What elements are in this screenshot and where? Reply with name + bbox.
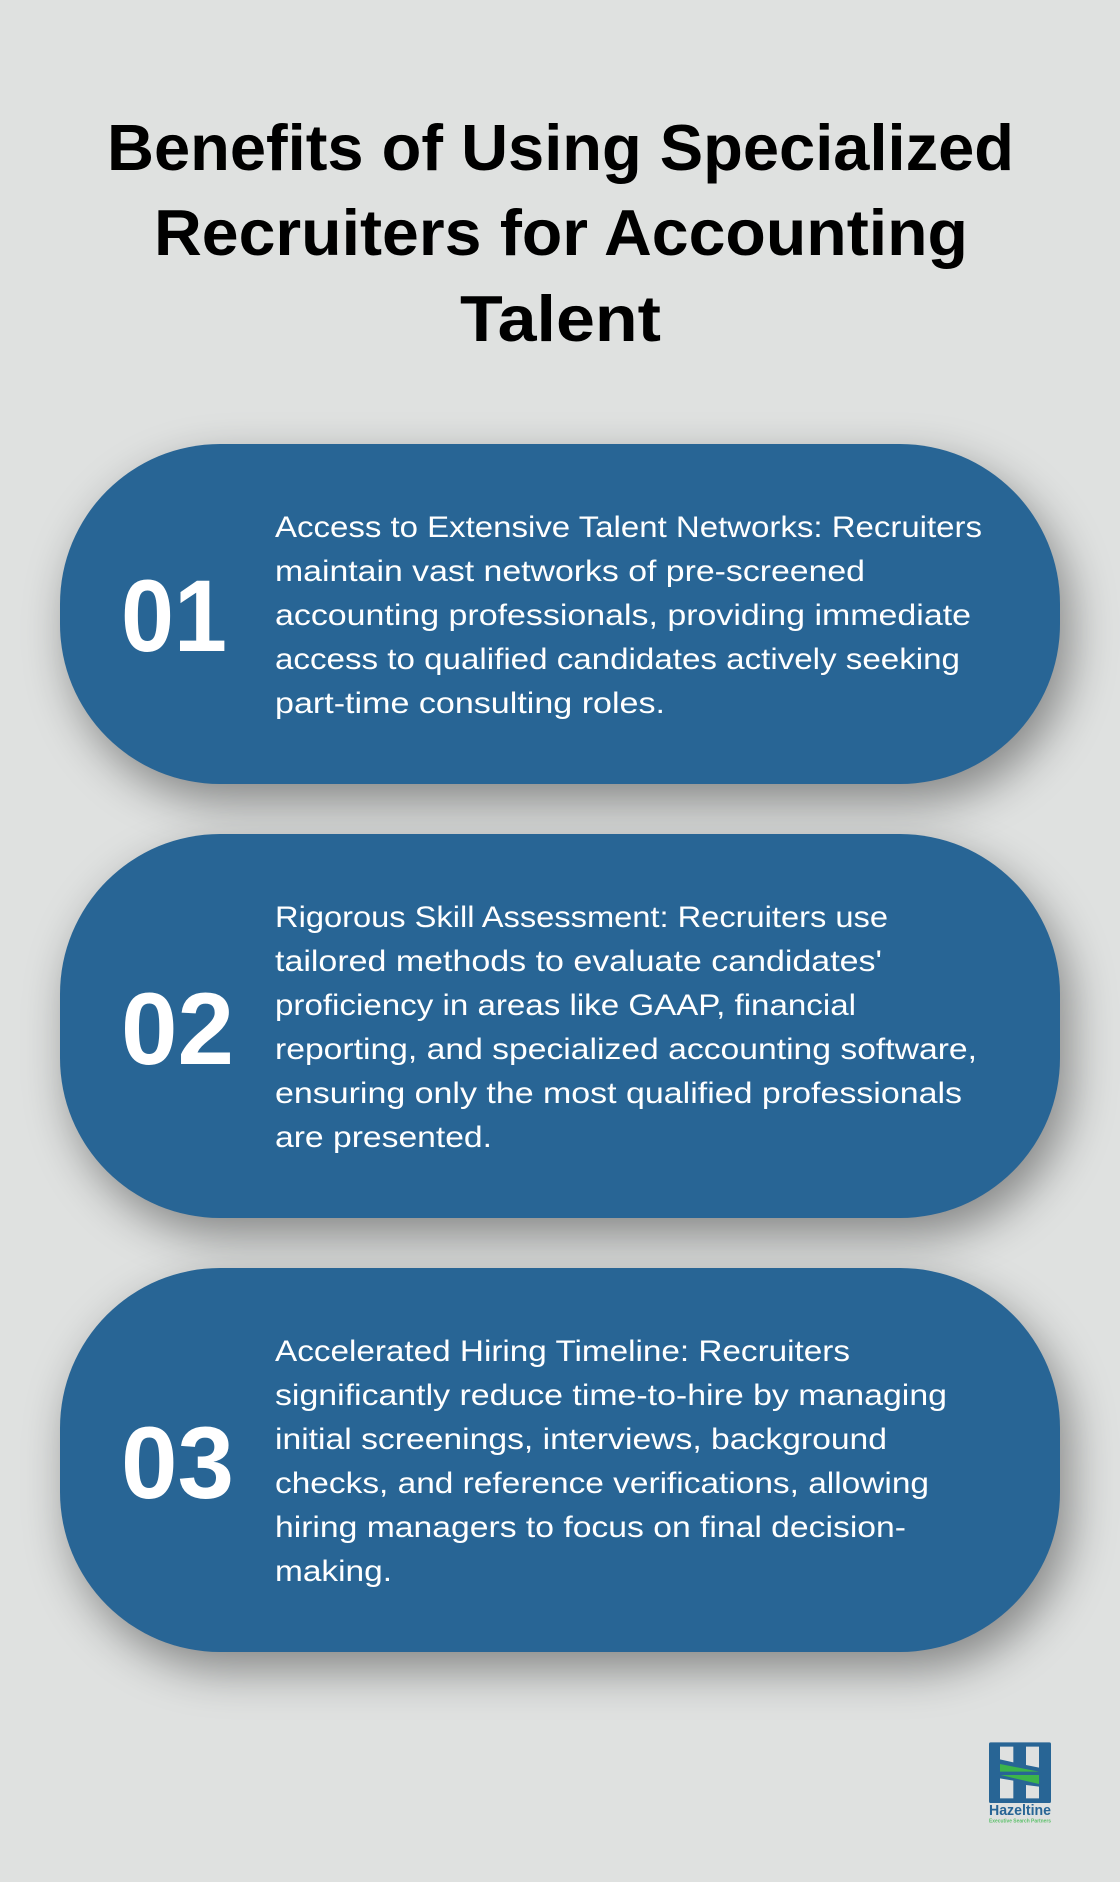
text: skill assessment description: tailored methods to evaluate candidates' [275, 945, 882, 978]
icon: Hazeltine logo: Executive Search Partners [989, 1818, 1051, 1824]
text: skill assessment description [275, 901, 977, 1154]
text: talent networks description: part-time consulting roles. [275, 687, 665, 720]
text: hiring timeline description: initial screenings, interviews, background [275, 1423, 887, 1456]
text: skill assessment description: proficiency in areas like GAAP, financial [275, 989, 856, 1022]
number 01: 01 [121, 559, 227, 673]
text: talent networks description: maintain vast networks of pre-screened [275, 555, 865, 588]
text: hiring timeline description [275, 1335, 947, 1588]
title: Talent [460, 282, 661, 355]
panel: hiring timeline [60, 1268, 1060, 1652]
text: talent networks description [275, 511, 982, 720]
panel: skill assessment [60, 834, 1060, 1218]
title [107, 111, 1014, 355]
icon: Hazeltine logo [989, 1742, 1051, 1824]
text: skill assessment description: are presented. [275, 1121, 492, 1154]
title: Recruiters for Accounting [154, 196, 968, 269]
text: hiring timeline description: checks, and reference verifications, allowing [275, 1467, 929, 1500]
text: skill assessment description: ensuring only the most qualified professionals [275, 1077, 962, 1110]
text: hiring timeline description: hiring managers to focus on final decision- [275, 1511, 906, 1544]
title: Benefits of Using Specialized [107, 111, 1014, 184]
number 02: 02 [121, 972, 234, 1086]
text: skill assessment description: reporting, and specialized accounting software, [275, 1033, 977, 1066]
text: talent networks description: Access to Extensive Talent Networks: Recruiters [275, 511, 982, 544]
panel: talent networks [60, 444, 1060, 784]
text: hiring timeline description: significantly reduce time-to-hire by managing [275, 1379, 947, 1412]
text: hiring timeline description: Accelerated Hiring Timeline: Recruiters [275, 1335, 850, 1368]
text: talent networks description: accounting professionals, providing immediate [275, 599, 971, 632]
text: skill assessment description: Rigorous Skill Assessment: Recruiters use [275, 901, 888, 934]
icon: Hazeltine logo: Hazeltine [989, 1802, 1051, 1819]
text: hiring timeline description: making. [275, 1555, 392, 1588]
text: talent networks description: access to qualified candidates actively seeking [275, 643, 960, 676]
number 03: 03 [121, 1406, 234, 1520]
